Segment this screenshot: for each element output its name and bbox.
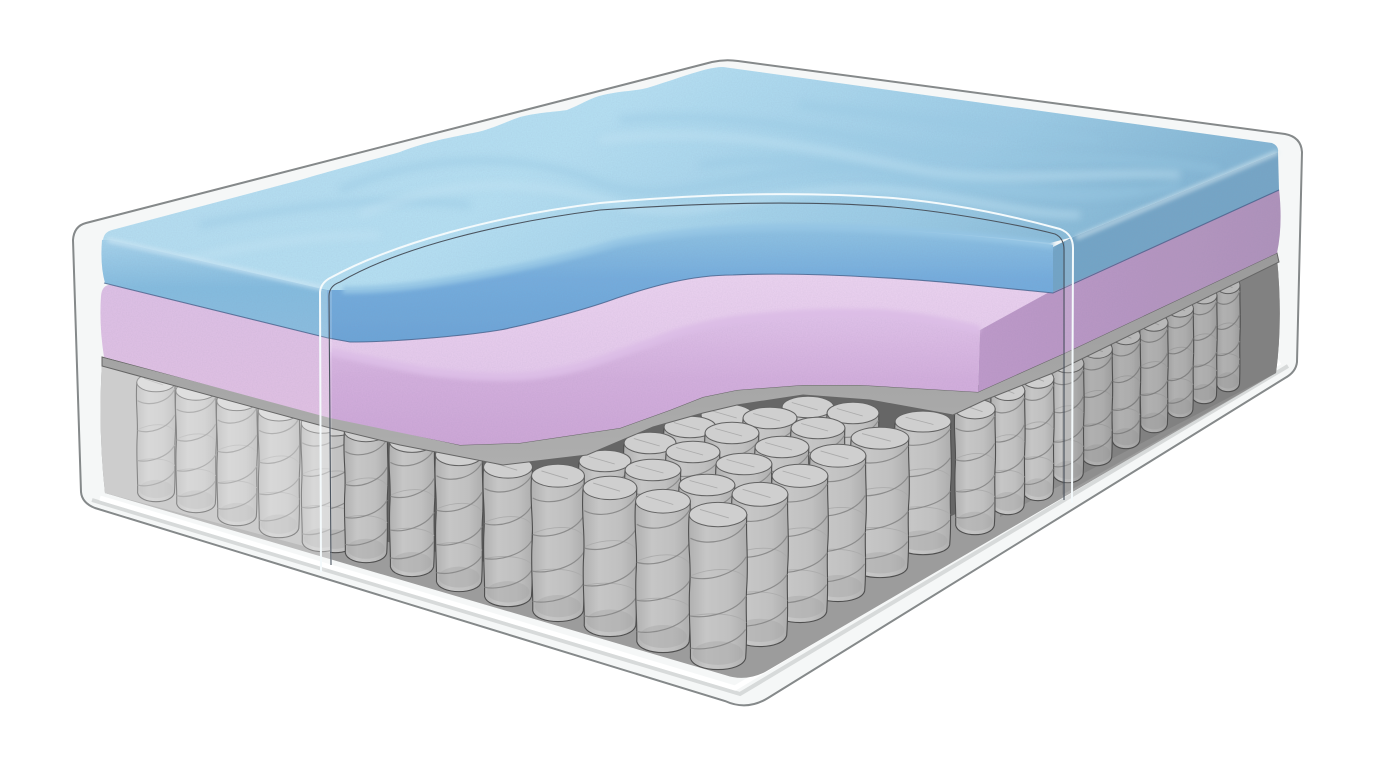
springs: left side under cover xyxy=(136,373,343,552)
soft fold on blue foam xyxy=(343,227,1053,290)
film highlight along left edge xyxy=(108,240,322,288)
cover seam white outer line xyxy=(320,194,1073,572)
contact shadow lines under blue foam xyxy=(104,190,1279,342)
cover wash over left springs xyxy=(101,362,332,560)
foam layer: lilac xyxy=(100,189,1281,445)
lilac foam left side xyxy=(100,285,332,418)
pocket springs: interior rows xyxy=(578,396,879,623)
foam layer: blue xyxy=(101,67,1279,342)
pocket springs: front right row xyxy=(731,411,951,647)
pocket springs: front left row xyxy=(314,416,747,670)
soft waves on top surface xyxy=(205,117,1181,226)
lilac foam cut front face xyxy=(330,313,980,445)
soft fold on lilac foam xyxy=(330,313,980,377)
blue foam left side xyxy=(101,238,330,338)
blue foam cut front face xyxy=(327,227,1053,342)
lilac foam right side xyxy=(978,189,1281,392)
blue foam top surface xyxy=(103,67,1278,290)
blue foam right side xyxy=(1053,152,1279,292)
cover seam dark inner line xyxy=(329,203,1064,565)
springs: right side under cover xyxy=(954,277,1240,535)
clear outer cover xyxy=(73,60,1302,705)
gray padding sheet xyxy=(102,253,1279,465)
film shade over right springs xyxy=(1062,258,1280,495)
film highlight along right edge xyxy=(1076,152,1278,238)
illustration: cutaway mattress in clear cover xyxy=(72,59,1303,706)
lilac foam cut top surface xyxy=(328,272,1055,377)
transparent cover cut seam xyxy=(320,194,1073,572)
base and interior behind springs xyxy=(101,258,1280,678)
